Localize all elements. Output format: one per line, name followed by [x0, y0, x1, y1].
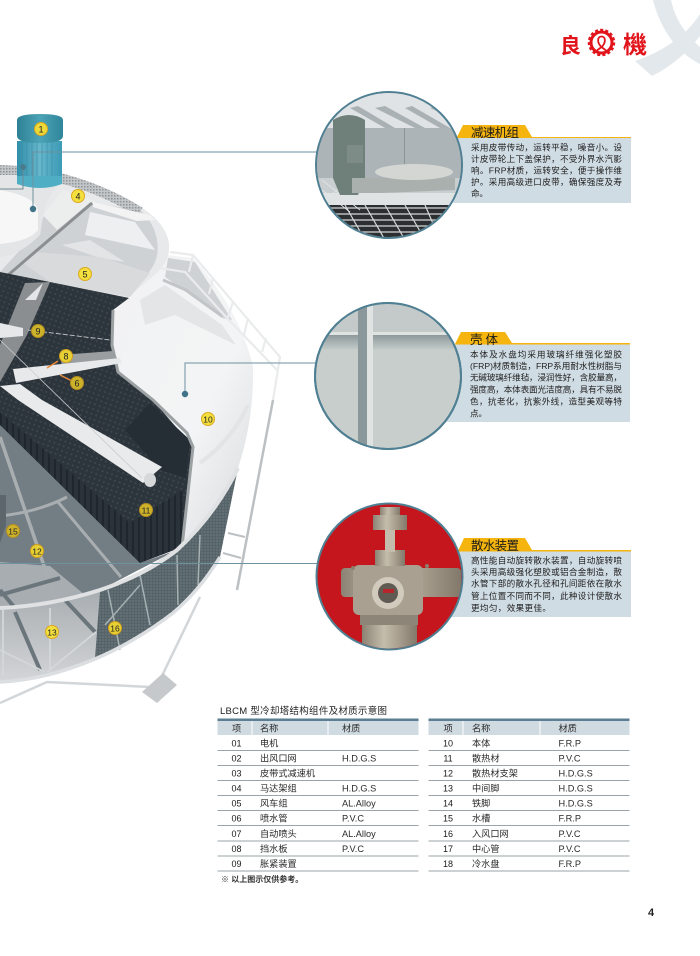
description text: 护。采用高级进口皮带，确保强度及寿: [471, 176, 622, 187]
row 18: 18: [443, 859, 453, 869]
description text: 更均匀，效果更佳。: [471, 602, 551, 613]
row 02: [231, 752, 376, 764]
row 10: 10: [443, 738, 453, 748]
description text: 色，抗老化，抗紫外线，造型美观等特: [470, 396, 622, 406]
row 08: [231, 843, 364, 854]
table: items 01-09: [218, 718, 418, 871]
description text: 强度高，本体表面光洁度高，具有不易脱: [470, 384, 622, 394]
shell lip band: [200, 405, 248, 463]
description text: 无碱玻璃纤维毡，浸润性好，含胶量高，: [470, 372, 622, 382]
table header: 名称: [472, 722, 490, 734]
badge 12: [30, 544, 44, 558]
ladder: [223, 400, 273, 590]
row 12: [443, 768, 593, 778]
leader line to shell: [182, 363, 316, 397]
logo: [560, 30, 647, 59]
motor cap: [17, 114, 63, 143]
badge 13: [46, 626, 58, 638]
row 05: 05: [231, 798, 242, 808]
row 12: 散热材支架: [472, 768, 518, 778]
row 08: P.V.C: [342, 844, 364, 854]
badge 6: 6: [74, 378, 80, 388]
photo: spray device: [316, 504, 462, 655]
row 11: 散热材: [472, 752, 500, 764]
row 15: F.R.P: [558, 814, 581, 824]
leader line to spray device: [0, 562, 318, 564]
heading: 减速机组: [471, 126, 519, 140]
table header: 名称: [260, 722, 278, 734]
row 17: P.V.C: [558, 844, 581, 854]
heading tab: [455, 332, 630, 344]
description background: [440, 344, 630, 422]
badge 1: 1: [38, 124, 44, 134]
description text: 响。FRP材质，运转安全，便于操作维: [471, 164, 622, 176]
table header: [428, 718, 630, 735]
motor body: [17, 141, 62, 179]
row 01: 电机: [260, 738, 278, 748]
row 13: 中间脚: [472, 782, 500, 794]
stair recess: [165, 258, 232, 320]
background watermark: [635, 0, 700, 76]
badge 10: 10: [203, 414, 213, 424]
row 02: H.D.G.S: [342, 754, 376, 764]
row 13: H.D.G.S: [558, 784, 593, 794]
badge 9: 9: [35, 326, 41, 336]
row 15: [443, 812, 581, 824]
fan dome: [0, 175, 57, 257]
row 11: P.V.C: [558, 754, 581, 764]
logo gear: [589, 30, 614, 55]
row 16: P.V.C: [558, 829, 581, 839]
row 05: AL.Alloy: [342, 798, 376, 808]
row 07: AL.Alloy: [342, 829, 376, 839]
number badges: [6, 122, 214, 638]
panel: spray device: [316, 504, 631, 655]
motor: [17, 114, 63, 188]
row 17: 中心管: [472, 843, 500, 854]
stair railing: [160, 252, 280, 400]
motor frame: [43, 190, 93, 230]
description text: [471, 554, 622, 613]
cooling tower illustration: [0, 114, 320, 703]
badge 10: [202, 412, 214, 426]
row 11: 11: [443, 754, 453, 764]
row 08: 挡水板: [260, 843, 288, 854]
row 04: [231, 782, 376, 794]
table: items 10-18: [428, 718, 630, 871]
panel: reducer: [315, 90, 631, 240]
motor base: [17, 176, 62, 188]
row 08: 08: [231, 844, 242, 854]
badge 13: 13: [47, 628, 57, 638]
tower legs: [0, 597, 200, 703]
row 17: 17: [443, 844, 453, 854]
row 14: 铁脚: [472, 798, 490, 808]
photo: reducer: [315, 90, 465, 240]
table header: 项: [444, 724, 453, 734]
row 13: 13: [443, 784, 453, 794]
heading tab: [458, 538, 631, 552]
tower foot: [142, 673, 177, 703]
badge 4: [72, 190, 84, 202]
footnote: ※ 以上图示仅供参考。: [221, 874, 303, 884]
badge 16: 16: [110, 624, 120, 634]
row 15: 15: [443, 814, 453, 824]
photo: shell: [315, 303, 461, 449]
row 07: 自动喷头: [260, 828, 297, 839]
shell edge: [112, 310, 193, 547]
fill lower rim: [0, 468, 238, 608]
badge 11: 11: [142, 506, 151, 516]
badge 15: 15: [8, 526, 18, 536]
row 14: H.D.G.S: [558, 798, 593, 808]
row 05: [231, 798, 376, 808]
diagonal beam: [0, 203, 92, 282]
row 01: 01: [231, 738, 242, 748]
row 06: [231, 812, 364, 824]
row 14: 14: [443, 798, 453, 808]
row 07: [231, 828, 376, 839]
row 09: 胀紧装置: [260, 858, 297, 869]
leader line to reducer: [30, 152, 320, 212]
deck interior: [0, 203, 158, 297]
description text: 高性能自动旋转散水装置，自动旋转喷: [471, 554, 622, 566]
row 04: 04: [231, 784, 242, 794]
row 03: 03: [231, 768, 242, 778]
badge 15: [6, 524, 20, 538]
row 15: 水槽: [472, 812, 490, 824]
row 02: 02: [231, 754, 242, 764]
lower floor: [0, 425, 177, 608]
row 11: [443, 752, 581, 764]
logo text left: 良: [560, 34, 581, 58]
description background: [440, 137, 631, 203]
row 01: [231, 738, 278, 748]
row 04: 马达架组: [260, 782, 297, 794]
row 13: [443, 782, 593, 794]
heading tab: [457, 125, 631, 138]
table title: LBCM 型冷却塔结构组件及材质示意图: [220, 705, 387, 717]
inlet net: [95, 468, 238, 658]
row 18: 冷水盘: [472, 858, 500, 869]
table header: [218, 718, 418, 735]
description text: 头采用高级强化塑胶或铝合金制造，散: [471, 566, 622, 577]
row 18: [443, 858, 581, 869]
badge 5: [78, 268, 92, 280]
table header: 材质: [342, 722, 360, 734]
description text: 采用皮带传动，运转平稳，噪音小。设: [471, 142, 622, 152]
logo text right: 機: [623, 32, 647, 59]
description text: 本体及水盘均采用玻璃纤维强化塑胶: [470, 348, 622, 360]
row 04: H.D.G.S: [342, 784, 376, 794]
row 16: [443, 829, 581, 839]
badge 8: 8: [63, 352, 69, 362]
row 07: 07: [231, 829, 242, 839]
row 09: [231, 858, 297, 869]
badge 11: [140, 504, 152, 516]
table header: 项: [232, 724, 241, 734]
badge 1: [34, 122, 48, 136]
central tank: [0, 495, 6, 543]
page number: 4: [648, 907, 655, 919]
row 06: 喷水管: [260, 812, 288, 824]
row 06: 06: [231, 814, 242, 824]
row 09: 09: [231, 859, 242, 869]
description text: (FRP)材质制造，FRP系用耐水性树脂与: [470, 360, 622, 371]
row 17: [443, 843, 581, 854]
row 03: [231, 768, 315, 778]
grating: [0, 170, 140, 212]
badge 5: 5: [82, 270, 88, 280]
table header: 材质: [558, 722, 577, 734]
row 18: F.R.P: [558, 859, 581, 869]
heading: 壳 体: [470, 333, 498, 347]
row 03: 皮带式减速机: [260, 768, 315, 778]
description text: [471, 142, 622, 198]
description text: 计皮带轮上下盖保护，不受外界水汽影: [471, 153, 622, 164]
description background: [440, 551, 631, 617]
description text: [470, 348, 622, 418]
badge 6: [70, 376, 84, 390]
badge 16: [108, 622, 122, 634]
panel: shell: [315, 303, 630, 449]
row 16: 入风口网: [472, 829, 509, 839]
row 16: 16: [443, 829, 453, 839]
description text: 管上位置不同而不同，此种设计使散水: [471, 590, 622, 601]
badge 9: [32, 324, 44, 338]
badge 8: [60, 350, 72, 362]
row 10: [443, 738, 581, 748]
fan hub arms: [0, 282, 162, 487]
heading: 散水装置: [471, 538, 519, 553]
row 10: F.R.P: [558, 738, 581, 748]
row 12: 12: [443, 768, 453, 778]
badge 12: 12: [32, 546, 42, 556]
leader dot: motor frame: [0, 164, 26, 189]
fan blade: [23, 252, 150, 297]
row 05: 风车组: [260, 798, 288, 808]
description text: 命。: [471, 188, 488, 198]
fan deck: [0, 165, 169, 310]
description text: 点。: [470, 408, 487, 418]
row 12: H.D.G.S: [558, 768, 593, 778]
fill media: [0, 272, 193, 563]
row 06: P.V.C: [342, 814, 364, 824]
tower body shell: [112, 255, 253, 547]
row 02: 出风口网: [260, 752, 297, 764]
floor struts: [0, 437, 121, 675]
badge 4: 4: [75, 192, 81, 202]
description text: 水管下部的散水孔径和孔间距依在散水: [471, 578, 622, 588]
row 14: [443, 798, 593, 808]
row 10: 本体: [472, 738, 490, 748]
